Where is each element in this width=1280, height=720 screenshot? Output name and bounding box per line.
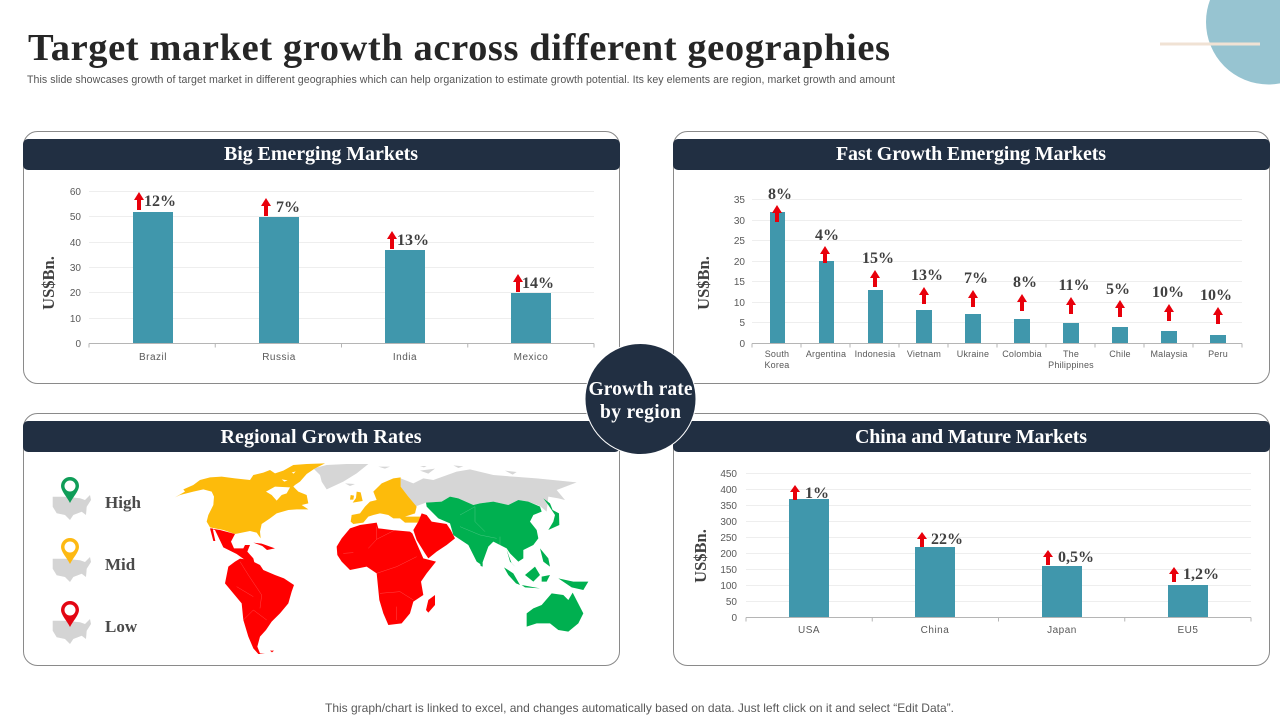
bar chart: fast growth emerging markets: 4% [815, 227, 839, 244]
subtitle: This slide showcases growth of target market in different geographies which can help organization to estimate growth potential. Its key elements are region, market growth and amount [27, 74, 895, 86]
legend: low [53, 601, 138, 644]
bar chart: fast growth emerging markets: The [1063, 349, 1079, 359]
bar chart: big emerging markets: US$Bn. [39, 256, 58, 310]
bar chart: big emerging markets: 12% [144, 193, 176, 210]
bar chart: china and mature markets: 1% [805, 485, 829, 502]
bar chart: china and mature markets: 100 [720, 581, 737, 592]
bar chart: big emerging markets: 20 [70, 288, 81, 299]
legend: high [53, 477, 141, 520]
bar chart: fast growth emerging markets: 5% [1106, 281, 1130, 298]
heading: Regional Growth Rates: Regional Growth Rates [220, 426, 422, 448]
heading: China and Mature Markets: China and Mature Markets [855, 426, 1087, 448]
bar chart: fast growth emerging markets: 0 [739, 339, 745, 350]
bar chart: fast growth emerging markets: 35 [734, 195, 745, 206]
title: Target market growth across different geographies [28, 27, 890, 69]
bar chart: china and mature markets: USA [798, 625, 820, 636]
bar chart: fast growth emerging markets: 8% [1013, 274, 1037, 291]
bar chart: fast growth emerging markets: Philippines [1048, 360, 1094, 370]
bar chart: china and mature markets: 350 [720, 501, 737, 512]
legend: mid [53, 538, 136, 582]
bar chart: fast growth emerging markets: 15% [862, 250, 894, 267]
footer note: This graph/chart is linked to excel, and changes automatically based on data. Just left click on it and select “Edit Data”. [325, 701, 954, 715]
bar chart: fast growth emerging markets: Ukraine [957, 349, 989, 359]
bar chart: china and mature markets: China [921, 625, 949, 636]
panel: China and Mature Markets [673, 414, 1270, 666]
bar chart: china and mature markets: 450 [720, 469, 737, 480]
bar chart: fast growth emerging markets: 5 [739, 318, 745, 329]
bar chart: big emerging markets: Mexico [514, 352, 548, 363]
bar chart: fast growth emerging markets: 13% [911, 267, 943, 284]
heading: Big Emerging Markets: Big Emerging Markets [224, 143, 418, 165]
accent line [1160, 42, 1260, 46]
bar chart: fast growth emerging markets: Vietnam [907, 349, 941, 359]
bar chart: big emerging markets: 7% [276, 199, 300, 216]
legend: mid: Mid [105, 555, 136, 574]
bar chart: fast growth emerging markets: 11% [1058, 277, 1090, 294]
bar chart: fast growth emerging markets: 8% [768, 186, 792, 203]
bar chart: big emerging markets: India [393, 352, 417, 363]
bar chart: china and mature markets [691, 469, 1251, 636]
decorative corner circle [1206, 0, 1280, 84]
center badge: growth rate by region: Growth rate [588, 379, 693, 400]
heading: Fast Growth Emerging Markets: Fast Growth Emerging Markets [836, 143, 1106, 165]
bar chart: big emerging markets: Russia [262, 352, 296, 363]
bar chart: china and mature markets: EU5 [1178, 625, 1198, 636]
bar chart: big emerging markets: 40 [70, 238, 81, 249]
bar chart: china and mature markets: Japan [1047, 625, 1077, 636]
bar chart: big emerging markets: 10 [70, 314, 81, 325]
bar chart: china and mature markets: 1,2% [1183, 566, 1219, 583]
bar chart: china and mature markets: 250 [720, 533, 737, 544]
bar chart: fast growth emerging markets: 10 [734, 298, 745, 309]
legend: low: Low [105, 617, 138, 636]
panel: Fast Growth Emerging Markets [673, 132, 1270, 384]
bar chart: fast growth emerging markets: 15 [734, 277, 745, 288]
bar chart: china and mature markets: 0 [731, 613, 737, 624]
panel: Big Emerging Markets [23, 132, 620, 384]
bar chart: china and mature markets: 400 [720, 485, 737, 496]
heading: China and Mature Markets [673, 421, 1270, 452]
bar chart: fast growth emerging markets: 7% [964, 270, 988, 287]
bar chart: fast growth emerging markets: Korea [764, 360, 790, 370]
bar chart: fast growth emerging markets: Colombia [1002, 349, 1042, 359]
bar chart: china and mature markets: 200 [720, 549, 737, 560]
center badge: growth rate by region [585, 344, 696, 454]
bar chart: fast growth emerging markets: Argentina [806, 349, 846, 359]
bar chart: big emerging markets: 14% [522, 275, 554, 292]
heading: Regional Growth Rates [23, 421, 620, 452]
bar chart: big emerging markets: 0 [75, 339, 81, 350]
bar chart: fast growth emerging markets: Indonesia [855, 349, 895, 359]
bar chart: china and mature markets: US$Bn. [691, 529, 710, 583]
bar chart: big emerging markets: 60 [70, 187, 81, 198]
bar chart: china and mature markets: 0,5% [1058, 549, 1094, 566]
bar chart: china and mature markets: 150 [720, 565, 737, 576]
bar chart: fast growth emerging markets: 25 [734, 236, 745, 247]
bar chart: big emerging markets: Brazil [139, 352, 167, 363]
bar chart: china and mature markets: 300 [720, 517, 737, 528]
panel: Regional Growth Rates [23, 414, 620, 666]
bar chart: fast growth emerging markets: US$Bn. [694, 256, 713, 310]
heading: Fast Growth Emerging Markets [673, 139, 1270, 170]
bar chart: fast growth emerging markets: South [765, 349, 789, 359]
bar chart: big emerging markets: 30 [70, 263, 81, 274]
bar chart: fast growth emerging markets [694, 186, 1242, 370]
bar chart: fast growth emerging markets: 20 [734, 257, 745, 268]
bar chart: fast growth emerging markets: 10% [1200, 287, 1232, 304]
bar chart: big emerging markets: 50 [70, 212, 81, 223]
bar chart: big emerging markets [39, 187, 594, 363]
bar chart: fast growth emerging markets: Peru [1208, 349, 1228, 359]
world map [175, 463, 588, 654]
bar chart: china and mature markets: 22% [931, 531, 963, 548]
bar chart: fast growth emerging markets: 30 [734, 216, 745, 227]
bar chart: fast growth emerging markets: Malaysia [1150, 349, 1188, 359]
legend: high: High [105, 493, 141, 512]
heading: Big Emerging Markets [23, 139, 620, 170]
bar chart: big emerging markets: 13% [397, 232, 429, 249]
center badge: growth rate by region: by region [600, 402, 681, 423]
bar chart: fast growth emerging markets: Chile [1109, 349, 1131, 359]
bar chart: fast growth emerging markets: 10% [1152, 284, 1184, 301]
bar chart: china and mature markets: 50 [726, 597, 737, 608]
